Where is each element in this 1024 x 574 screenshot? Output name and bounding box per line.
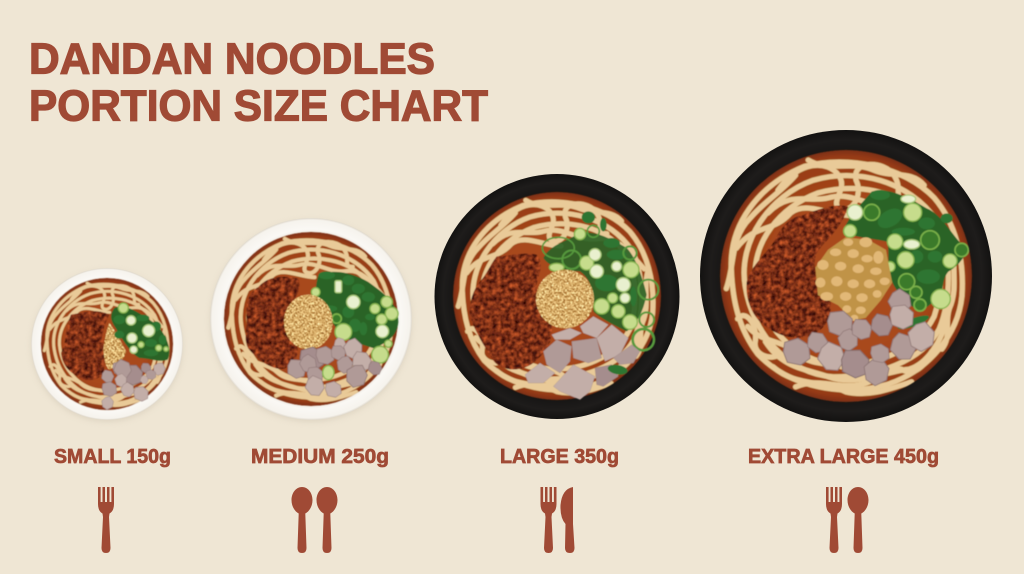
chili meat sauce [470,254,552,369]
noodles and broth: large [453,192,661,400]
crushed peanuts [103,323,126,370]
noodles and broth: small [41,278,173,410]
pork [525,316,640,400]
noodles and broth: extra large [720,150,972,402]
toppings: extra large [746,190,968,388]
title: DANDAN NOODLES [29,36,435,84]
medium bowl [210,218,412,422]
icon: fork and spoon for extra large [826,487,868,553]
label: medium: MEDIUM 250g [251,446,389,468]
crushed peanuts [815,237,892,321]
label: extra large: EXTRA LARGE 450g [748,446,939,468]
pork [99,357,166,411]
chili meat sauce [246,277,300,369]
title: PORTION SIZE CHART [29,82,488,130]
crushed peanuts [536,270,594,328]
label: small: SMALL 150g [54,446,171,468]
pork [783,286,939,388]
crushed peanuts [284,295,333,349]
icon: fork and knife for large [540,487,574,553]
small bowl [31,268,183,422]
label: large: LARGE 350g [500,446,619,468]
chili meat sauce [746,205,848,338]
toppings: small [61,303,169,411]
large bowl [434,174,680,419]
noodles and broth: medium [224,232,398,406]
scallions [311,271,398,363]
scallions [843,190,968,332]
scallions [542,211,658,350]
pork [285,336,384,399]
chili meat sauce [61,311,109,380]
icon: fork for small [98,487,114,553]
toppings: medium [246,271,398,399]
extra large bowl [700,130,992,422]
scallions [111,303,169,361]
title [29,36,488,130]
toppings: large [470,211,658,400]
icon: two spoons for medium [292,487,338,553]
